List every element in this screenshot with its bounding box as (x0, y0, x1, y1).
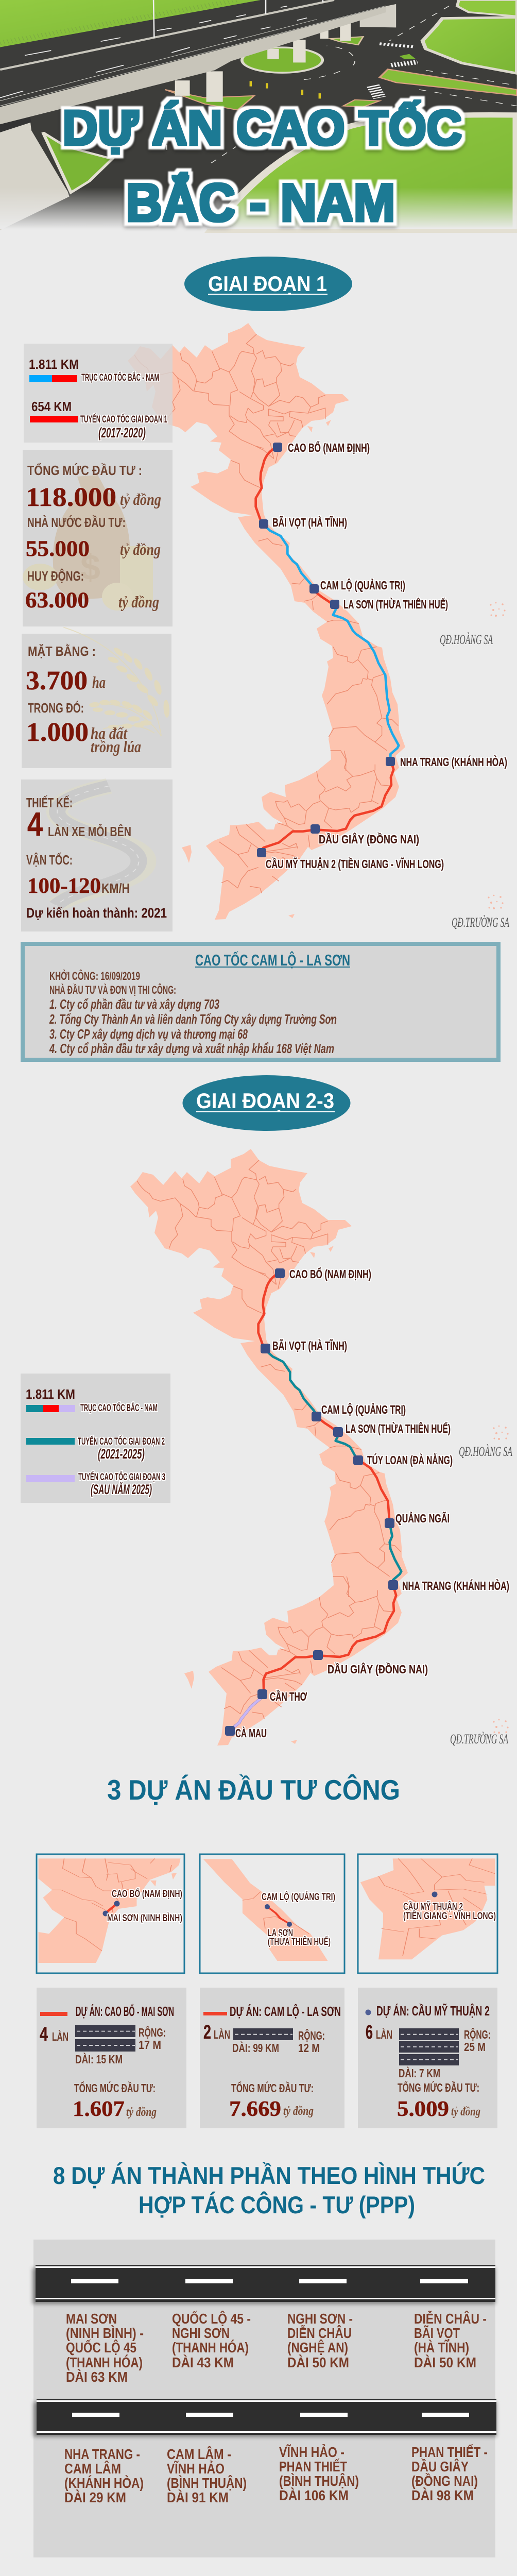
panel: land: ha (92, 673, 106, 691)
projects: bottom row: NHA TRANG - (64, 2446, 140, 2462)
callout: cam lộ - la sơn: KHỞI CÔNG: 16/09/2019 (49, 970, 140, 982)
projects: top row: DÀI 63 KM (66, 2369, 128, 2385)
panel: design: VẬN TỐC: (26, 852, 73, 868)
bridge columns (175, 22, 351, 102)
map: vietnam phase 1 (128, 323, 509, 930)
panel: length legend phase 2-3: TUYẾN CAO TỐC GIAI ĐOẠN 2 (78, 1436, 165, 1447)
projects: bottom row: (KHÁNH HÒA) (64, 2475, 144, 2491)
projects: bottom row: DÀI 29 KM (64, 2489, 126, 2505)
panel: length legend phase 1: 654 KM (31, 399, 72, 414)
panel: project cao bồ - mai sơn: RỘNG: (139, 2025, 166, 2039)
panel: land: trồng lúa (91, 737, 141, 756)
inset map: cầu mỹ thuận 2: CẦU MỸ THUẬN 2 (403, 1901, 463, 1912)
map labels (266, 440, 509, 930)
inset map: cam lộ - la sơn (200, 1854, 344, 1973)
projects: top row: MAI SƠN (66, 2311, 117, 2327)
panel: investment: 63.000 (25, 588, 89, 613)
panel: land: TRONG ĐÓ: (28, 700, 84, 716)
route markers (257, 443, 395, 857)
panel: project cầu mỹ thuận 2: LÀN (376, 2027, 392, 2041)
callout: cam lộ - la sơn: 4. Cty cổ phần đầu tư xây dựng và xuất nhập khẩu 168 Việt Nam (49, 1041, 334, 1056)
projects: bottom row: (BÌNH THUẬN) (167, 2475, 247, 2491)
callout: cam lộ - la sơn (23, 944, 498, 1060)
map labels: BÃI VỌT (HÀ TĨNH) (272, 1338, 347, 1352)
panel: investment (23, 450, 173, 626)
panel: investment: 55.000 (26, 537, 90, 561)
map labels: DẦU GIÂY (ĐỒNG NAI) (319, 832, 419, 846)
projects: top row: QUỐC LỘ 45 (66, 2339, 136, 2355)
panel: land: 1.000 (26, 718, 89, 747)
projects: top row: DÀI 43 KM (172, 2354, 234, 2370)
panel: length legend phase 2-3: TRỤC CAO TỐC BẮC - NAM (80, 1402, 158, 1414)
icon: money bag and coins (23, 475, 153, 611)
panel: project cam lộ - la sơn: DỰ ÁN: CAM LỘ - LA SƠN (230, 2004, 341, 2019)
badge: giai đoạn 2-3 (182, 1075, 350, 1131)
panel: project cam lộ - la sơn: tỷ đồng (283, 2105, 314, 2118)
projects: bottom row: PHAN THIẾT (279, 2459, 347, 2475)
panel: project cao bồ - mai sơn (37, 1988, 186, 2128)
callout: cam lộ - la sơn: 3. Cty CP xây dựng dịch vụ và thương mại 68 (49, 1026, 248, 1042)
title: DỰ ÁN CAO TỐC (62, 100, 462, 156)
panel: design: LÀN XE MỖI BÊN (48, 824, 131, 839)
panel: investment: tỷ đồng (120, 490, 161, 509)
panel: length legend phase 1: 1.811 KM (29, 357, 79, 372)
icon: road lanes (75, 2025, 135, 2052)
map labels: CAM LỘ (QUẢNG TRỊ) (321, 1402, 406, 1416)
inset map: cao bồ - mai sơn (37, 1854, 184, 1973)
projects: bottom row: DÀI 91 KM (167, 2489, 229, 2505)
panel: project cầu mỹ thuận 2: tỷ đồng (451, 2105, 480, 2119)
projects: top row: (THANH HÓA) (172, 2340, 249, 2355)
callout: cam lộ - la sơn: 2. Tổng Cty Thành An và liên danh Tổng Cty xây dựng Trường Sơn (49, 1011, 337, 1027)
projects: bottom row: CAM LÂM (64, 2461, 121, 2477)
panel: project cao bồ - mai sơn: 17 M (139, 2038, 161, 2052)
projects: top row: DÀI 50 KM (414, 2354, 476, 2370)
projects: bottom row: PHAN THIẾT - (411, 2444, 488, 2460)
badge: giai đoạn 1: GIAI ĐOẠN 1 (208, 272, 327, 296)
panel: investment: 118.000 (26, 483, 116, 512)
panel: project cầu mỹ thuận 2 (358, 1988, 497, 2128)
badge: giai đoạn 1 (184, 257, 352, 311)
projects: bottom row: (BÌNH THUẬN) (279, 2473, 359, 2489)
panel: length legend phase 1 (24, 344, 173, 443)
heading: 8 ppp projects: HỢP TÁC CÔNG - TƯ (PPP) (139, 2191, 415, 2218)
panel: project cao bồ - mai sơn: DÀI: 15 KM (75, 2052, 123, 2066)
map labels (235, 1267, 512, 1747)
panel: length legend phase 1: TUYẾN CAO TỐC GIAI ĐOẠN 1 (80, 414, 167, 425)
panel: project cao bồ - mai sơn: tỷ đồng (126, 2106, 157, 2119)
panel: project cao bồ - mai sơn: TỔNG MỨC ĐẦU TƯ: (74, 2081, 156, 2095)
panel: land: 3.700 (26, 666, 88, 696)
title (62, 100, 462, 233)
map labels: CAO BỔ (NAM ĐỊNH) (289, 1267, 371, 1281)
projects: top row: QUỐC LỘ 45 - (172, 2310, 251, 2327)
map labels: CẦN THƠ (270, 1689, 307, 1703)
icon: wheat (63, 628, 170, 736)
panel: length legend phase 1: (2017-2020) (98, 425, 146, 440)
inset map: cầu mỹ thuận 2 (358, 1854, 497, 1973)
callout: cam lộ - la sơn: CAO TỐC CAM LỘ - LA SƠN (195, 951, 350, 969)
panel: investment: tỷ đồng (120, 540, 161, 558)
panel: project cầu mỹ thuận 2: 6 (366, 2022, 373, 2043)
hero image: highway interchange (0, 0, 517, 230)
map labels: CÀ MAU (235, 1726, 267, 1740)
panel: length legend phase 2-3: (SAU NĂM 2025) (91, 1481, 152, 1497)
panel: project cao bồ - mai sơn: LÀN (52, 2029, 68, 2043)
panel: project cam lộ - la sơn: 12 M (298, 2041, 320, 2055)
panel: project cao bồ - mai sơn: DỰ ÁN: CAO BỔ - MAI SƠN (76, 2004, 174, 2019)
panel: project cam lộ - la sơn: LÀN (214, 2027, 230, 2041)
icon: winding road (56, 786, 145, 905)
panel: design: Dự kiến hoàn thành: 2021 (26, 905, 167, 921)
panel: length legend phase 1: TRỤC CAO TỐC BẮC - NAM (81, 372, 159, 383)
projects: bottom row: VĨNH HẢO - (279, 2444, 344, 2460)
panel: land: MẶT BẰNG : (28, 643, 96, 659)
panel: investment: NHÀ NƯỚC ĐẦU TƯ: (27, 515, 126, 530)
panel: project cầu mỹ thuận 2: RỘNG: (464, 2027, 491, 2041)
panel: length legend phase 2-3: 1.811 KM (26, 1386, 75, 1402)
panel: project cầu mỹ thuận 2: DÀI: 7 KM (399, 2066, 440, 2080)
panel: length legend phase 2-3: TUYẾN CAO TỐC GIAI ĐOẠN 3 (78, 1471, 165, 1483)
map: vietnam phase 2-3 (130, 1149, 512, 1747)
badge: giai đoạn 2-3: GIAI ĐOẠN 2-3 (196, 1089, 334, 1113)
heading: 3 public projects: 3 DỰ ÁN ĐẦU TƯ CÔNG (107, 1774, 400, 1806)
map labels: DẦU GIÂY (ĐỒNG NAI) (328, 1662, 428, 1676)
panel: design: KM/H (101, 880, 130, 896)
road: top (32, 2265, 495, 2304)
road: bottom (33, 2399, 496, 2437)
panel: project cam lộ - la sơn (200, 1988, 344, 2128)
panel: project cầu mỹ thuận 2: 5.009 (397, 2097, 449, 2121)
title: BẮC - NAM (126, 173, 395, 233)
map labels: QUẢNG NGÃI (395, 1511, 450, 1525)
panel: project cam lộ - la sơn: RỘNG: (298, 2028, 325, 2042)
panel: project cao bồ - mai sơn: 4 (40, 2024, 48, 2045)
inset map: cao bồ - mai sơn: CAO BỔ (NAM ĐỊNH) (112, 1888, 182, 1900)
panel: investment: HUY ĐỘNG: (27, 568, 84, 584)
projects: bottom row: DẦU GIÂY (411, 2459, 469, 2475)
panel: project cam lộ - la sơn: 7.669 (229, 2097, 281, 2121)
projects: top row: DIỄN CHÂU (287, 2325, 352, 2341)
panel: length legend phase 2-3: (2021-2025) (98, 1446, 145, 1462)
panel: design: THIẾT KẾ: (26, 795, 73, 810)
map labels: LA SƠN (THỪA THIÊN HUẾ) (343, 597, 448, 611)
map labels: TÚY LOAN (ĐÀ NẴNG) (367, 1453, 453, 1467)
projects: top row: NGHI SƠN (172, 2325, 230, 2341)
panel: land (22, 628, 171, 768)
projects: bottom row: DÀI 98 KM (411, 2487, 474, 2503)
panel: investment: TỔNG MỨC ĐẦU TƯ : (27, 463, 142, 478)
projects: top row: DÀI 50 KM (287, 2354, 349, 2370)
projects: top row: (NINH BÌNH) - (66, 2325, 144, 2341)
projects: bottom row: DÀI 106 KM (279, 2487, 349, 2503)
map labels: LA SƠN (THỪA THIÊN HUẾ) (346, 1421, 451, 1435)
projects: top row: DIỄN CHÂU - (414, 2311, 487, 2327)
projects: bottom row (64, 2444, 488, 2505)
panel: project cam lộ - la sơn: DÀI: 99 KM (232, 2041, 279, 2055)
route: phase 1 segments (256, 448, 399, 851)
inset map: cam lộ - la sơn: LA SƠN (268, 1928, 293, 1939)
inset map: cao bồ - mai sơn: MAI SƠN (NINH BÌNH) (107, 1912, 182, 1924)
projects: bottom row: VĨNH HẢO (167, 2460, 225, 2477)
panel: project cao bồ - mai sơn: 1.607 (73, 2097, 125, 2121)
projects: top row (66, 2310, 487, 2385)
projects: top row: (HÀ TĨNH) (414, 2340, 469, 2355)
map labels: CAO BỔ (NAM ĐỊNH) (288, 440, 370, 454)
callout: cam lộ - la sơn: 1. Cty cổ phần đầu tư và xây dựng 703 (49, 996, 219, 1012)
projects: bottom row: (ĐỒNG NAI) (411, 2473, 478, 2489)
route markers (225, 1268, 398, 1736)
map labels: CẦU MỸ THUẬN 2 (TIỀN GIANG - VĨNH LONG) (266, 857, 444, 871)
icon: road lanes (233, 2028, 293, 2040)
inset map: cam lộ - la sơn: CAM LỘ (QUẢNG TRỊ) (262, 1891, 335, 1903)
route: phase 2-3 segments (230, 1274, 401, 1730)
map labels: BÃI VỌT (HÀ TĨNH) (272, 515, 347, 529)
projects: top row: (NGHỆ AN) (287, 2340, 348, 2355)
icon: money bag and coins: $ (80, 547, 100, 587)
panel: project cầu mỹ thuận 2: 25 M (464, 2040, 486, 2054)
panel: investment: tỷ đồng (118, 592, 159, 611)
panel: project cầu mỹ thuận 2: TỔNG MỨC ĐẦU TƯ: (398, 2080, 479, 2094)
panel: length legend phase 2-3 (21, 1374, 170, 1503)
panel: design (21, 779, 173, 931)
panel: ppp projects (32, 2240, 496, 2557)
map labels: CAM LỘ (QUẢNG TRỊ) (320, 578, 405, 592)
heading: 8 ppp projects (53, 2162, 485, 2218)
panel: project cam lộ - la sơn: 2 (203, 2022, 211, 2043)
projects: top row: NGHI SƠN - (287, 2311, 353, 2327)
panel: land: ha đất (91, 724, 128, 742)
projects: bottom row: CAM LÂM - (167, 2446, 231, 2462)
icon: road lanes (399, 2028, 459, 2065)
projects: top row: BÃI VỌT (414, 2325, 460, 2341)
inset map: cam lộ - la sơn: (THỪA THIÊN HUẾ) (268, 1936, 331, 1947)
panel: design: 100-120 (27, 874, 101, 898)
callout: cam lộ - la sơn: NHÀ ĐẦU TƯ VÀ ĐƠN VỊ THI CÔNG: (49, 984, 176, 996)
panel: design: 4 (27, 805, 43, 843)
panel: project cam lộ - la sơn: TỔNG MỨC ĐẦU TƯ: (231, 2081, 314, 2095)
projects: top row: (THANH HÓA) (66, 2354, 143, 2370)
